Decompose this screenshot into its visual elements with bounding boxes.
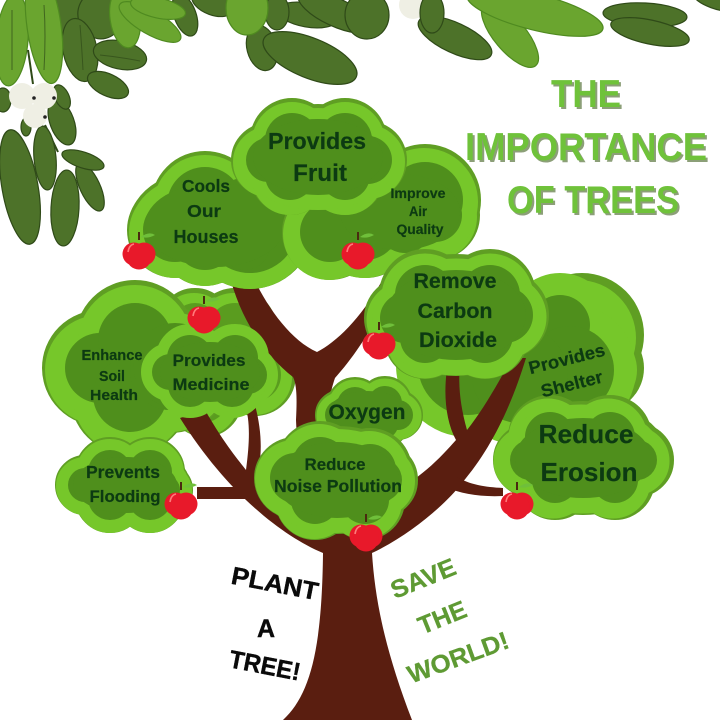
slogan: plant a tree: A — [257, 615, 275, 643]
labels on clouds: Medicine — [172, 375, 250, 394]
labels on clouds: Soil — [99, 369, 125, 385]
labels on clouds: Reduce — [304, 455, 366, 474]
labels on clouds: Health — [90, 388, 138, 404]
labels on clouds — [82, 128, 638, 506]
labels on clouds: Provides — [172, 351, 246, 370]
foliage: top center leaves — [226, 0, 389, 95]
labels on clouds: Provides — [268, 128, 366, 154]
labels on clouds: Our — [187, 201, 221, 221]
slogan: save the world: SAVE — [387, 553, 460, 605]
labels on clouds: Improve — [390, 185, 446, 201]
foliage: left hanging branch with berries — [0, 50, 110, 247]
title: IMPORTANCE — [465, 126, 707, 169]
title: OF TREES — [509, 181, 681, 224]
cloud: provides medicine — [152, 335, 267, 407]
labels on clouds: Dioxide — [419, 329, 497, 352]
cloud: reduce noise pollution — [269, 437, 402, 525]
labels on clouds: Flooding — [90, 487, 160, 506]
labels on clouds: Noise Pollution — [274, 476, 402, 496]
labels on clouds: Provides — [526, 340, 607, 378]
labels on clouds: Cools — [182, 176, 230, 196]
labels on clouds: Quality — [396, 221, 444, 237]
title: IMPORTANCE — [467, 128, 709, 171]
slogan: save the world: WORLD! — [404, 627, 513, 689]
apples — [122, 232, 534, 552]
slogan: save the world: THE — [414, 596, 471, 640]
slogan: save the world — [387, 553, 513, 689]
cloud: improve air quality — [299, 162, 463, 264]
slogan: plant a tree: PLANT — [229, 562, 321, 606]
title — [465, 73, 709, 224]
foliage: top left leaves — [0, 0, 238, 104]
labels on clouds: Remove — [414, 270, 496, 293]
slogan: plant a tree: TREE! — [227, 645, 303, 687]
cloud: reduce erosion — [508, 412, 657, 504]
labels on clouds: Oxygen — [328, 401, 406, 424]
labels on clouds: Reduce — [538, 419, 634, 449]
title: THE — [551, 73, 621, 116]
cloud: provides shelter — [418, 273, 644, 423]
cloud: remove carbon dioxide — [380, 265, 533, 365]
tree trunk and branches — [180, 255, 526, 720]
labels on clouds: Fruit — [293, 160, 347, 187]
labels on clouds: Air — [409, 203, 428, 219]
cloud: provides fruit — [246, 113, 392, 202]
title: THE — [553, 75, 623, 118]
cloud: oxygen — [325, 386, 413, 439]
labels on clouds: Enhance — [82, 348, 142, 364]
labels on clouds: Shelter — [539, 367, 605, 401]
labels on clouds: Houses — [174, 227, 238, 247]
slogan: plant a tree — [227, 562, 321, 687]
foliage: top right leaves — [399, 0, 720, 76]
labels on clouds: Carbon — [418, 300, 492, 323]
cloud: cools our houses — [143, 167, 298, 275]
labels on clouds: Prevents — [86, 462, 160, 482]
cloud: prevents flooding — [68, 450, 180, 521]
cloud: enhance soil health — [65, 303, 281, 434]
title: OF TREES — [507, 179, 679, 222]
labels on clouds: Erosion — [540, 457, 638, 487]
